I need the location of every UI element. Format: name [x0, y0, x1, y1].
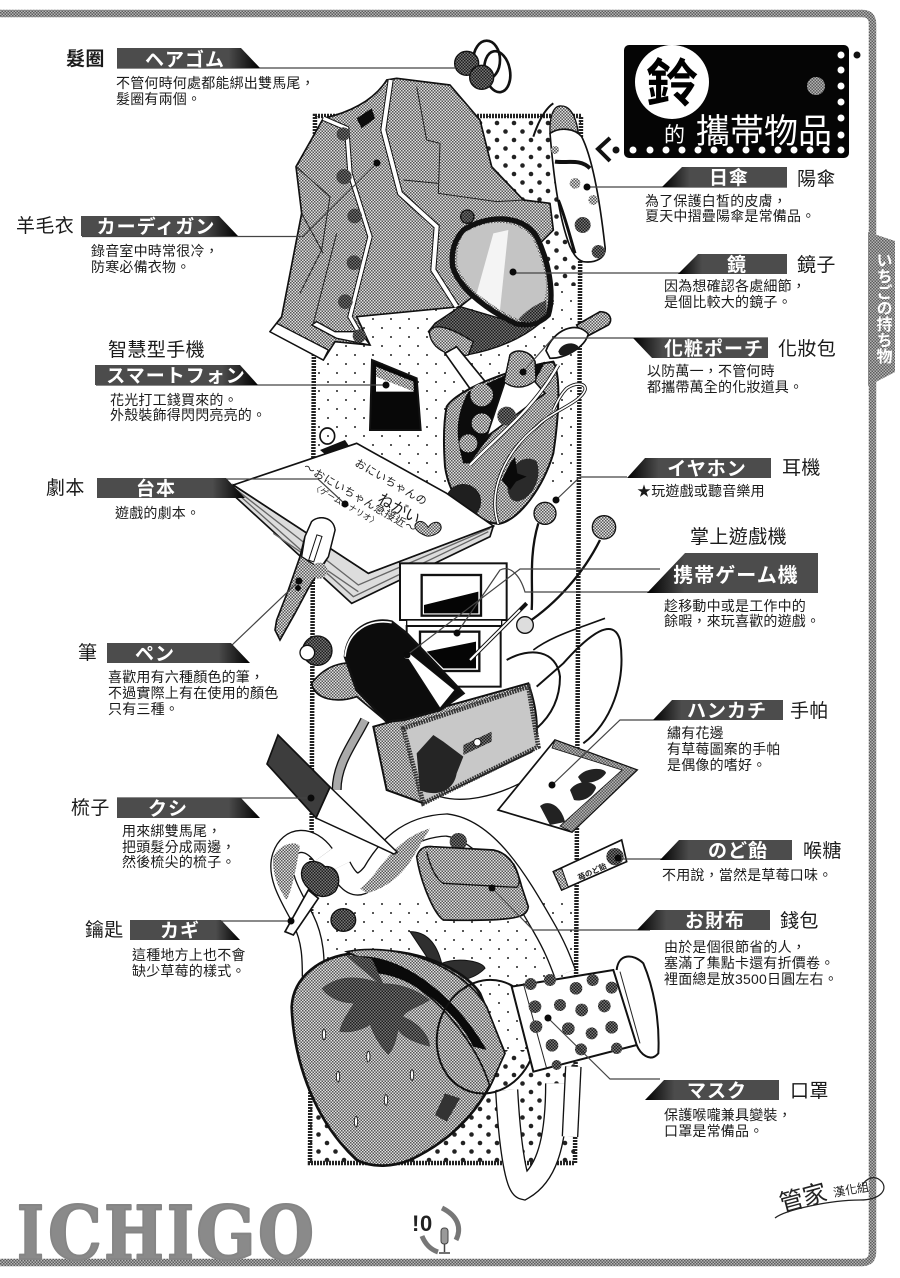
- label: wallet: 塞滿了集點卡還有折價卷。: [664, 955, 834, 971]
- label: parasol: 日傘: [709, 167, 749, 189]
- label: wallet: 裡面總是放3500日圓左右。: [664, 971, 838, 987]
- label: script: [46, 477, 245, 521]
- label: cardigan: [16, 215, 238, 275]
- label: handkerchief: ハンカチ: [687, 701, 767, 722]
- icon: handheld game console: [400, 563, 527, 687]
- icon: handkerchief with lace: [498, 740, 637, 832]
- label: wallet: 錢包: [780, 910, 819, 932]
- icon: makeup pouch flap under mirror: [428, 303, 553, 355]
- leader lines and dots: [82, 68, 787, 1079]
- label: throat candy: [660, 839, 842, 883]
- label: handheld game: 掌上遊戲機: [690, 526, 787, 548]
- label: cardigan: 防寒必備衣物。: [91, 259, 190, 275]
- label: smartphone: スマートフォン: [106, 366, 246, 387]
- icon: compact with brush: [546, 312, 611, 358]
- label: key: 這種地方上也不會: [132, 947, 246, 963]
- label: key: カギ: [160, 920, 200, 942]
- icon: lotion stick and gray tube: [429, 327, 487, 393]
- label: smartphone: [95, 339, 266, 423]
- label: cosmetic pouch: [633, 337, 836, 395]
- label: earphones: ★玩遊戲或聽音樂用: [637, 483, 765, 499]
- label: pen: [78, 642, 278, 717]
- label: wallet: 由於是個很節省的人，: [664, 939, 806, 955]
- title character in circle: 鈴: [646, 56, 698, 114]
- label: earphones: イヤホン: [667, 459, 747, 480]
- label: wallet: [637, 910, 838, 987]
- dotted backdrop panel: [300, 116, 590, 1165]
- label: pen: 筆: [78, 642, 97, 664]
- icon: script booklet: ねがい: [375, 490, 423, 528]
- label: parasol: 為了保護白皙的皮膚，: [645, 193, 787, 209]
- label: script: 遊戲的劇本。: [115, 505, 200, 521]
- footer logo: ICHIGO: I: [167, 1191, 194, 1277]
- label: handkerchief: 是偶像的嗜好。: [667, 757, 766, 773]
- label: cardigan: カーディガン: [97, 215, 215, 238]
- label: smartphone: 花光打工錢買來的。: [110, 392, 238, 408]
- title panel: [624, 45, 849, 158]
- illustration: lower items: [273, 825, 659, 1188]
- icon: leaves behind strawberry pouch: [410, 932, 485, 980]
- icon: hair ties: [455, 41, 513, 94]
- icon: smartphone: [370, 360, 421, 430]
- label: cardigan: 羊毛衣: [16, 215, 74, 237]
- label: smartphone: 智慧型手機: [108, 339, 205, 361]
- label: throat candy: 不用說，當然是草莓口味。: [662, 867, 832, 883]
- label: mask: マスク: [687, 1080, 747, 1102]
- label: parasol: 夏天中摺疊陽傘是常備品。: [645, 208, 815, 224]
- label: mask: 口罩是常備品。: [664, 1123, 763, 1139]
- label: script: 劇本: [46, 477, 85, 499]
- footer logo: ICHIGO: G: [196, 1191, 256, 1277]
- translator signature: 漢化組: [832, 1180, 870, 1200]
- title text: 的: [664, 124, 685, 147]
- icon: folding umbrella: [533, 103, 605, 262]
- icon: wallet: [417, 833, 528, 920]
- label: wallet: お財布: [685, 910, 745, 932]
- side tab: section title: [868, 232, 895, 386]
- label: comb: 然後梳尖的梳子。: [122, 854, 236, 870]
- label: throat candy: のど飴: [708, 839, 768, 862]
- label: pen: ペン: [135, 644, 175, 665]
- label: comb: 梳子: [71, 797, 110, 819]
- label: mirror: 因為想確認各處細節，: [664, 278, 806, 294]
- label: mirror: 鏡子: [797, 254, 836, 276]
- label: mirror: [664, 253, 836, 310]
- label: cosmetic pouch: 化妝包: [778, 338, 836, 360]
- strawberry charm: [446, 484, 481, 519]
- label: earphones: [627, 457, 821, 499]
- label: script: 台本: [136, 477, 176, 500]
- title text large: 攜帯物品: [696, 113, 832, 151]
- label: handkerchief: 繡有花邊: [667, 725, 724, 741]
- label: mask: [645, 1080, 829, 1139]
- label: mirror: 鏡: [727, 253, 747, 276]
- label: parasol: [645, 167, 836, 224]
- label: earphones: 耳機: [782, 457, 821, 479]
- icon: script booklet: おにいちゃんの: [352, 456, 430, 508]
- label: handkerchief: 有草莓圖案的手帕: [667, 741, 781, 757]
- footer logo: microphone page mark: !: [412, 1211, 419, 1236]
- label: cosmetic pouch: 化粧ポーチ: [664, 337, 764, 360]
- icon: portable console in bag: [345, 621, 463, 722]
- label: handheld game: 携帯ゲーム機: [673, 564, 799, 587]
- label: handheld game: 趁移動中或是工作中的: [664, 598, 806, 614]
- footer logo: ICHIGO: H: [104, 1191, 164, 1277]
- icon: face mask: [424, 957, 659, 1105]
- title character in circle: [635, 45, 709, 119]
- label: parasol: 陽傘: [797, 168, 836, 190]
- icon: mirror: [452, 210, 551, 325]
- icon: strawberry throat candy box: [553, 840, 627, 890]
- footer logo: microphone page mark: [412, 1208, 459, 1253]
- label: handkerchief: [653, 700, 829, 773]
- label: hair tie: 不管何時何處都能綁出雙馬尾，: [116, 75, 315, 91]
- label: comb: クシ: [148, 798, 188, 820]
- footer logo: ICHIGO: O: [258, 1191, 314, 1277]
- illustration: script, pen, game devices, bag: [233, 428, 621, 803]
- translator signature: 管家: [777, 1179, 830, 1218]
- icon: shoulder strap: [273, 825, 573, 1188]
- translator signature: [775, 1178, 884, 1218]
- label: mask: 保護喉嚨兼具變裝，: [664, 1107, 792, 1123]
- decorative pointer arrow: [598, 52, 860, 161]
- footer logo: ICHIGO: C: [48, 1191, 102, 1277]
- label: comb: 把頭髮分成兩邊，: [122, 839, 236, 855]
- icon: comb: [267, 735, 397, 854]
- label: cardigan: 錄音室中時常很冷，: [91, 243, 219, 259]
- icon: key: [285, 861, 356, 935]
- footer logo: ICHIGO: I: [17, 1191, 44, 1277]
- label: cosmetic pouch: 以防萬一，不管何時: [647, 363, 775, 379]
- label: hair tie: 髮圈有兩個。: [116, 91, 201, 107]
- label: key: 鑰匙: [85, 919, 124, 941]
- label: pen: 喜歡用有六種顏色的筆，: [108, 669, 264, 685]
- footer logo: microphone page mark: 0: [420, 1211, 432, 1236]
- icon: strawberry throat candy box: 苺のど飴: [576, 860, 608, 882]
- icon: small strawberry: [807, 77, 825, 95]
- icon: bag with strap: [300, 636, 538, 803]
- icon: strawberry pouch: [292, 949, 505, 1166]
- label: key: [85, 919, 246, 979]
- footer logo: ICHIGO: [17, 1191, 314, 1277]
- icon: script booklet: [233, 443, 493, 603]
- label: cosmetic pouch: 都攜帶萬全的化妝道具。: [647, 379, 803, 395]
- label: comb: [71, 797, 260, 870]
- label: handheld game: 餘暇，來玩喜歡的遊戲。: [664, 613, 820, 629]
- label: handheld game: [647, 526, 820, 629]
- label: comb: 用來綁雙馬尾，: [122, 823, 221, 839]
- icon: earphones: [507, 502, 621, 743]
- icon: cardigan: [270, 78, 553, 360]
- label: mirror: 是個比較大的鏡子。: [664, 294, 792, 310]
- illustration: upper items: [270, 41, 611, 430]
- label: hair tie: 髮圈: [66, 48, 105, 70]
- icon: multicolour pen: [275, 518, 335, 640]
- label: throat candy: 喉糖: [803, 840, 842, 862]
- icon: script booklet: ～おにいちゃん急接近～: [301, 460, 419, 536]
- label: hair tie: [66, 48, 315, 107]
- label: handkerchief: 手帕: [790, 700, 829, 722]
- label: mask: 口罩: [790, 1081, 829, 1102]
- icon: script booklet: 〈ゲームシナリオ〉: [311, 481, 380, 527]
- label: pen: 不過實際上有在使用的顏色: [108, 685, 278, 701]
- side tab: section title: いちごの持ち物: [874, 252, 892, 364]
- label: pen: 只有三種。: [108, 701, 179, 717]
- label: hair tie: ヘアゴム: [145, 48, 225, 71]
- icon: binder clip: [320, 428, 352, 458]
- label: key: 缺少草莓的樣式。: [132, 963, 246, 979]
- label: smartphone: 外殼裝飾得閃閃亮亮的。: [110, 407, 266, 423]
- illustration: cosmetic pouch: [444, 351, 585, 524]
- pouch body: [444, 351, 585, 524]
